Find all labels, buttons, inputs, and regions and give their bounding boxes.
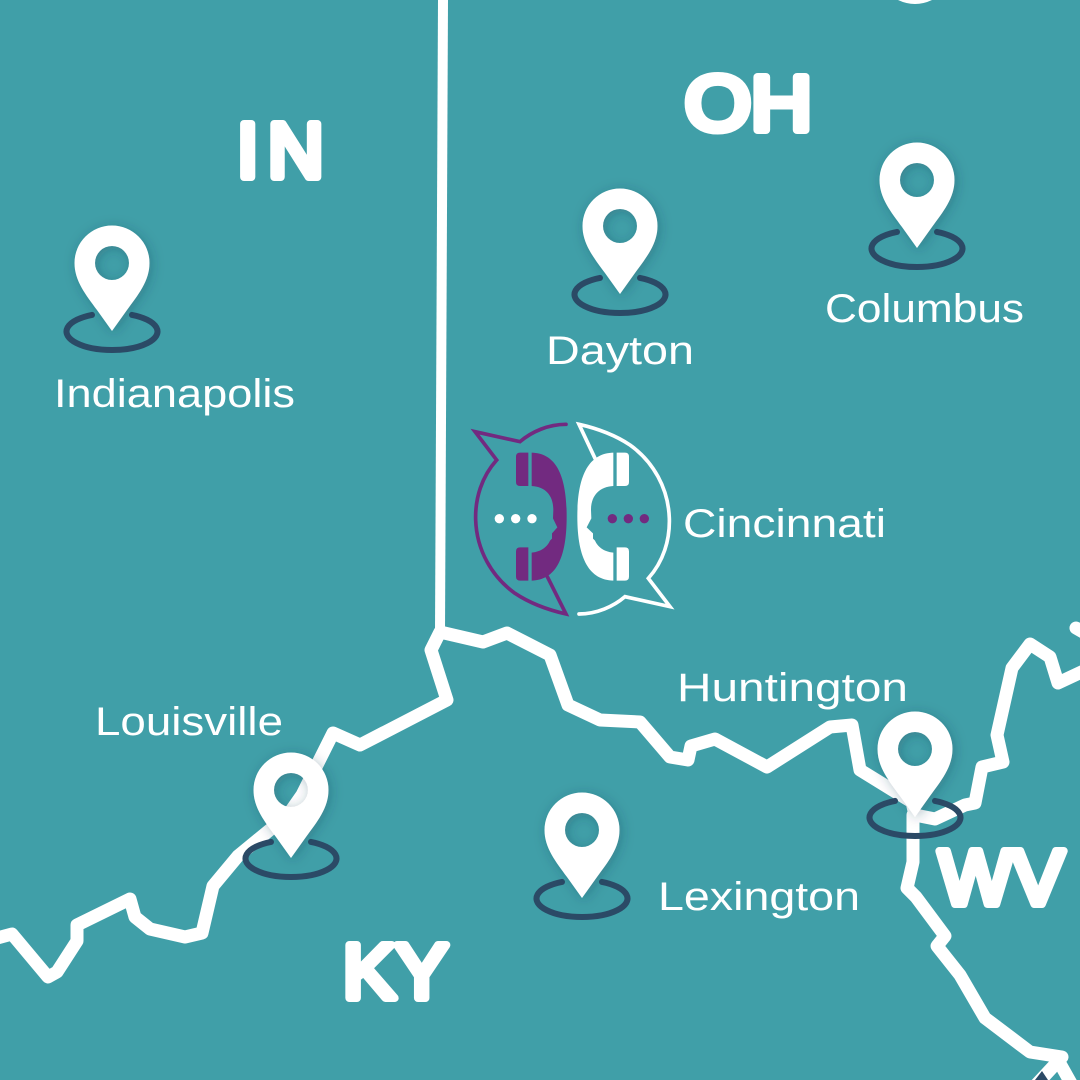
border: Indiana / Ohio <box>440 0 443 632</box>
state label: OH: OH <box>685 61 812 147</box>
city label: Columbus: Columbus <box>825 287 1024 331</box>
state label: IN: IN <box>237 108 324 194</box>
border: lower right spur <box>1058 1060 1072 1080</box>
border: Ohio River <box>0 632 1080 977</box>
dark corner <box>1035 1071 1048 1080</box>
city label: Huntington: Huntington <box>677 666 908 710</box>
border: West Virginia / Kentucky <box>907 815 1062 1080</box>
pin: Dayton <box>574 188 666 313</box>
state label: WV: WV <box>939 835 1065 921</box>
border: Pennsylvania edge <box>1076 628 1080 636</box>
city label: Louisville: Louisville <box>95 700 283 744</box>
city label: Cincinnati: Cincinnati <box>683 502 886 546</box>
purple dots <box>608 514 649 523</box>
white handset and face <box>577 453 629 581</box>
pin: Indianapolis <box>66 226 158 350</box>
city label: Indianapolis: Indianapolis <box>54 372 295 416</box>
pin: Louisville <box>246 752 336 877</box>
border: top edge lake <box>898 0 932 4</box>
pin: Lexington <box>536 792 628 917</box>
pin: Huntington <box>870 712 960 836</box>
icon: Cincinnati call logo <box>475 424 670 614</box>
city label: Lexington: Lexington <box>658 875 860 919</box>
white speech bubble <box>579 424 670 614</box>
white dots <box>495 514 537 523</box>
pin: Columbus <box>872 142 962 267</box>
state label: KY: KY <box>343 929 448 1015</box>
purple handset and face <box>516 453 567 581</box>
city label: Dayton: Dayton <box>546 329 694 373</box>
purple speech bubble <box>475 424 566 614</box>
